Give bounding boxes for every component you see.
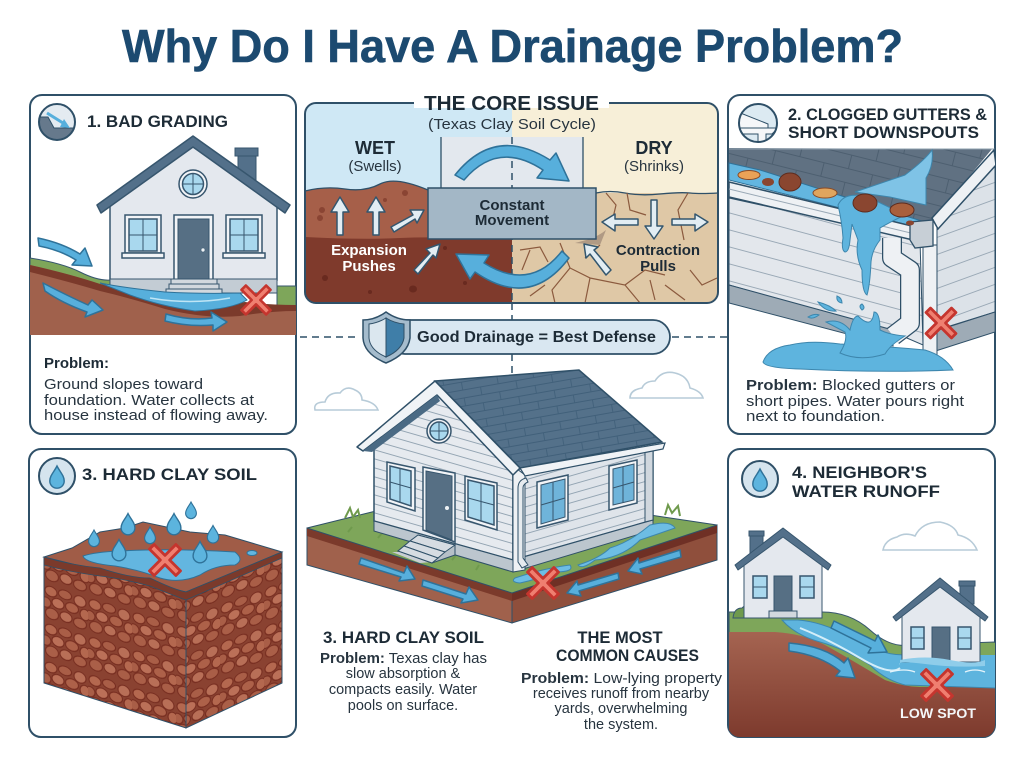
bush [732, 606, 744, 618]
dry label: (Shrinks) [624, 158, 684, 175]
downspout [892, 220, 937, 355]
heading: 2. CLOGGED GUTTERS & [788, 105, 987, 124]
wet label: WET [355, 138, 395, 158]
wet soil [305, 181, 512, 303]
cycle arrows [455, 146, 569, 288]
dry label: DRY [635, 138, 673, 158]
problem text: Ground slopes toward [44, 377, 203, 393]
panel: 2. clogged gutters [728, 95, 996, 434]
problem text [746, 378, 964, 425]
heading: 4. NEIGHBOR'S [792, 463, 927, 482]
panel: 1. bad grading [30, 95, 296, 434]
dry soil [512, 192, 718, 303]
banner: good drainage [363, 312, 670, 363]
text: the most common causes: yards, overwhelming [555, 701, 687, 717]
contraction label: Pulls [640, 258, 676, 275]
text: hard clay soil: slow absorption & [346, 666, 461, 682]
steps [392, 535, 455, 563]
text: hard clay soil [320, 629, 487, 714]
gable window [427, 419, 451, 443]
house body [357, 370, 665, 572]
problem text [44, 355, 268, 424]
runoff stream [782, 620, 996, 688]
heading: 3. HARD CLAY SOIL [82, 465, 257, 484]
red x [922, 670, 952, 700]
expansion label: Expansion [331, 242, 407, 259]
illustration: runoff [729, 528, 996, 738]
illustration: house on sloped ground [30, 136, 296, 335]
expansion label: Pushes [342, 258, 396, 275]
expansion label [331, 242, 407, 275]
puddle [83, 550, 240, 580]
contraction label: Contraction [616, 242, 700, 259]
house upper [735, 528, 831, 618]
text: the most common causes: Problem: Low-lying property [521, 671, 723, 687]
panel: the core issue [305, 93, 718, 303]
puddle stream [513, 523, 675, 583]
heading: 1. BAD GRADING [87, 112, 228, 131]
red x [242, 286, 270, 314]
text: hard clay soil: Problem: Texas clay has [320, 651, 487, 667]
debris [738, 170, 914, 226]
icon: shield [363, 312, 410, 363]
problem text: foundation. Water collects at [44, 393, 254, 409]
heading [792, 463, 940, 501]
icon: gutter [738, 104, 778, 146]
contraction label [616, 242, 700, 275]
problem text: Problem: [44, 355, 109, 372]
panel: 3. hard clay soil [29, 449, 296, 737]
foundation block: Movement [475, 212, 549, 229]
chimney [234, 148, 258, 180]
dashed dividers [300, 303, 728, 373]
wet label: (Swells) [348, 158, 402, 175]
raindrops [89, 502, 257, 563]
white arrows [331, 197, 708, 275]
text: the most common causes: receives runoff from nearby [533, 686, 710, 702]
flow arrows [359, 550, 681, 603]
icon: drop [742, 461, 778, 497]
panel: 4. neighbor's water runoff [728, 449, 996, 738]
text: hard clay soil: pools on surface. [348, 698, 458, 714]
title: Why Do I Have A Drainage Problem? [122, 20, 903, 72]
icon: slope [38, 104, 76, 142]
puddle and splash [763, 296, 953, 371]
red x [150, 544, 180, 576]
red x [528, 568, 558, 598]
wet label [348, 138, 402, 175]
arrows [789, 621, 887, 678]
foundation block: Constant [480, 197, 544, 214]
water overflow [838, 150, 932, 295]
problem text: Problem: Blocked gutters or [746, 378, 955, 394]
heading: THE CORE ISSUE [424, 93, 599, 115]
text: hard clay soil: 3. HARD CLAY SOIL [323, 629, 484, 647]
text: the most common causes [521, 629, 723, 733]
heading: WATER RUNOFF [792, 482, 940, 501]
clouds [315, 372, 703, 410]
text: the most common causes: the system. [584, 717, 658, 733]
icon: drop [39, 458, 75, 494]
problem text: house instead of flowing away. [44, 408, 268, 424]
downspout [518, 478, 528, 568]
center house illustration [307, 370, 717, 623]
problem text: next to foundation. [746, 409, 885, 425]
problem text: short pipes. Water pours right [746, 394, 964, 410]
banner: good drainage: Good Drainage = Best Defense [417, 329, 656, 346]
heading [788, 105, 987, 142]
windows [387, 460, 637, 530]
illustration: gutter overflow [729, 148, 996, 371]
cloud [883, 522, 977, 550]
subtitle: (Texas Clay Soil Cycle) [428, 116, 596, 133]
door [423, 467, 455, 542]
ground block [307, 510, 717, 623]
text: hard clay soil: compacts easily. Water [329, 682, 477, 698]
text: the most common causes: THE MOST [577, 629, 663, 647]
foundation block [428, 188, 596, 239]
heading: SHORT DOWNSPOUTS [788, 123, 979, 142]
house lower [893, 578, 996, 667]
arrows [38, 238, 227, 331]
low spot label: LOW SPOT [900, 705, 976, 721]
red x [926, 308, 956, 338]
dry label [624, 138, 684, 175]
soil block [44, 502, 282, 728]
grass [345, 505, 680, 570]
roof [435, 370, 662, 468]
text: the most common causes: COMMON CAUSES [556, 647, 699, 665]
